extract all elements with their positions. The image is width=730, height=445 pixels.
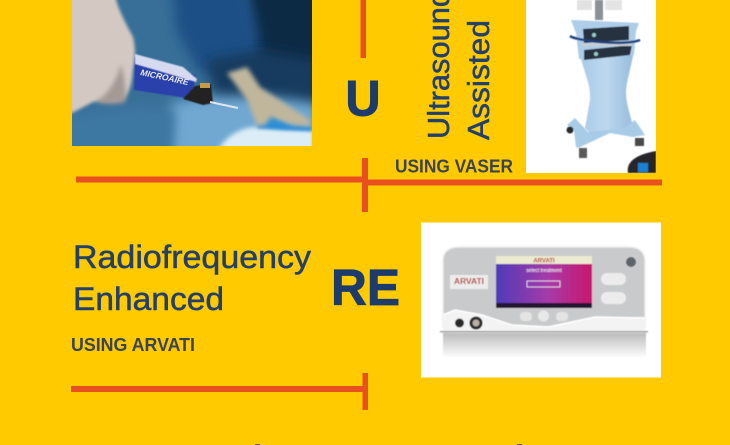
cart handle	[570, 36, 640, 43]
caption: USING VASER: USING VASER	[395, 156, 513, 176]
cart base	[567, 118, 645, 148]
white sheet	[217, 124, 312, 146]
base line	[440, 331, 648, 332]
image: ARVATI device: ARVATI	[454, 277, 484, 286]
cart monitors	[583, 26, 629, 43]
heading: Ultrasound Assisted: Assisted	[461, 20, 496, 140]
brand on handpiece: MICROAIRE	[140, 67, 190, 87]
caption: USING ARVATI: USING ARVATI	[71, 335, 195, 355]
screen title: ARVATI	[533, 258, 555, 264]
heading: Radiofrequency Enhanced: Enhanced	[73, 281, 224, 317]
controls	[601, 273, 626, 285]
letters RE: RE	[331, 259, 400, 316]
reflection	[443, 333, 646, 358]
foot pedal	[628, 151, 656, 173]
heading: Radiofrequency Enhanced	[73, 239, 311, 317]
image: VASER cart	[526, 0, 656, 173]
blue drape	[256, 116, 312, 134]
image: ARVATI device	[421, 222, 661, 378]
letter U: U	[346, 70, 380, 126]
vertical line above U	[360, 0, 366, 58]
gloved hand left	[72, 0, 138, 116]
heading: Radiofrequency Enhanced: Radiofrequency	[73, 239, 311, 275]
handpiece	[134, 57, 195, 99]
brand plate	[450, 275, 488, 289]
device body	[443, 247, 645, 327]
heading: Ultrasound Assisted	[421, 0, 496, 140]
photo: surgeon with MicroAire handpiece	[72, 0, 312, 146]
cart body	[578, 44, 635, 132]
red line with end tick	[71, 373, 368, 410]
gloved hand right	[227, 67, 310, 126]
red horizontal divider line with cross	[76, 158, 662, 212]
image: ARVATI device: select treatment	[526, 268, 562, 274]
screen	[496, 256, 592, 308]
ports	[455, 318, 464, 328]
cart pole and top boxes	[577, 0, 592, 10]
device lower white wave	[443, 310, 645, 331]
cut-off bottom text fragments	[255, 444, 522, 445]
